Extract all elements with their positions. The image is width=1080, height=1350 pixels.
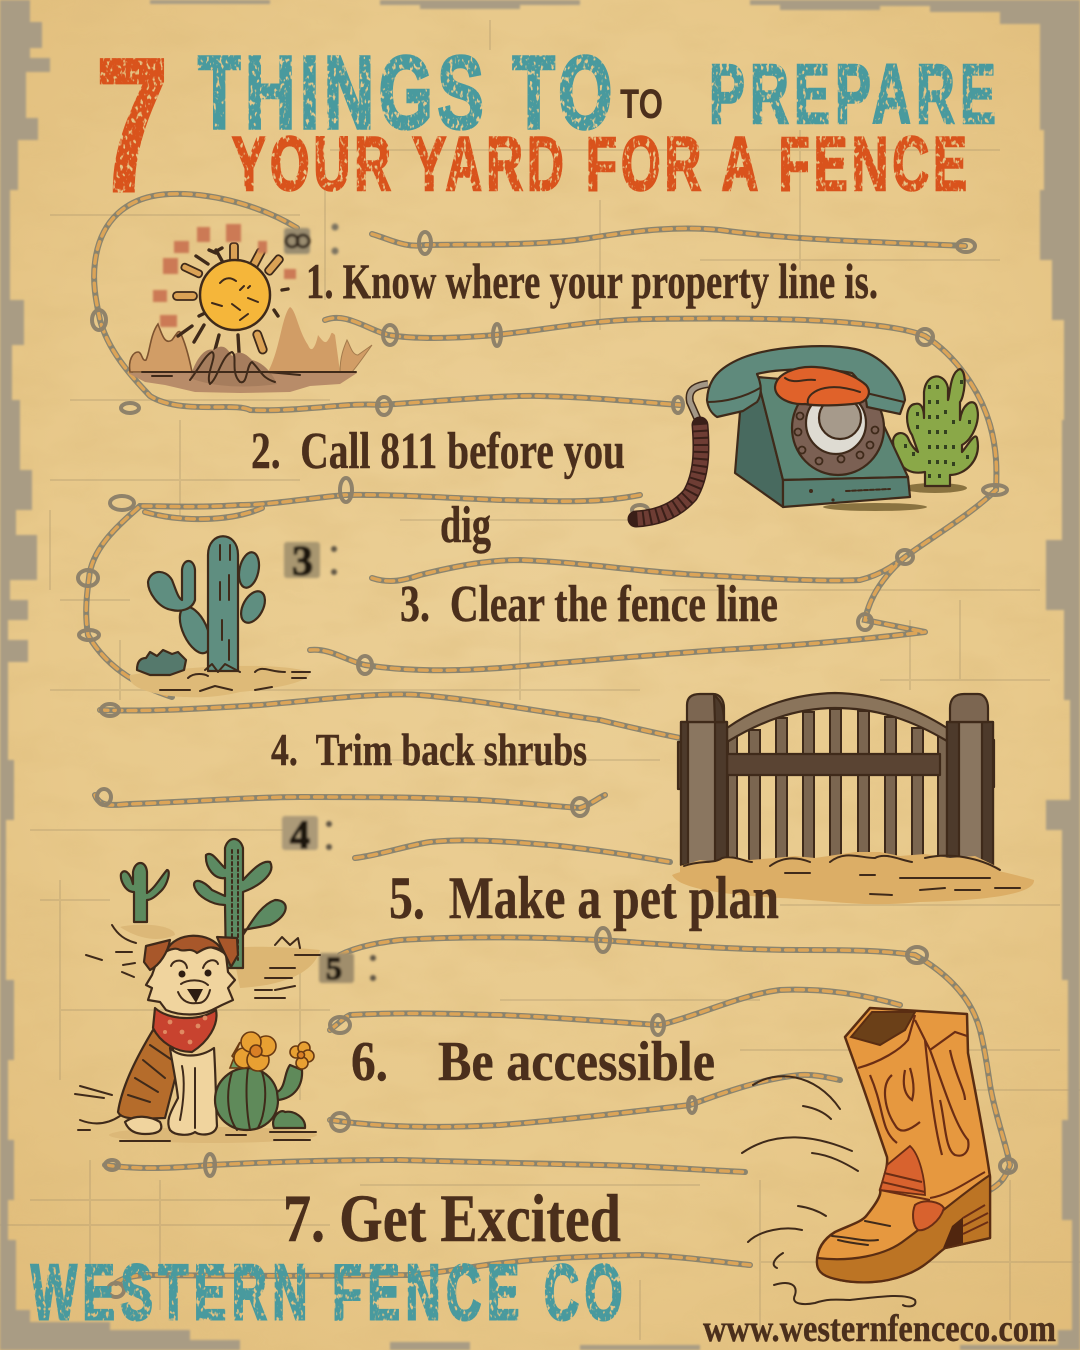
boot ankle panel bbox=[880, 1146, 925, 1195]
step 2 text: 2. Call 811 before you bbox=[251, 423, 625, 480]
step 2 text bbox=[251, 423, 625, 554]
flames and hills bbox=[130, 324, 192, 372]
marker 4: 4 bbox=[290, 812, 310, 857]
company name: WESTERN FENCE CO bbox=[31, 1248, 628, 1336]
orange cradle bbox=[775, 367, 869, 405]
marker 3: 3 bbox=[292, 539, 313, 585]
tall cactus bbox=[194, 839, 286, 968]
small shrub bbox=[273, 1111, 305, 1128]
boot opening bbox=[851, 1012, 915, 1045]
hook and cord bbox=[690, 384, 708, 420]
icon: wooden gate bbox=[672, 693, 1034, 904]
icon: dog with cacti bbox=[75, 839, 320, 1143]
step 6 text: 6. bbox=[351, 1031, 388, 1093]
shadow bbox=[823, 503, 927, 511]
barrel cactus bbox=[215, 1068, 278, 1130]
step 6 text bbox=[351, 1031, 715, 1093]
big seven: 7 bbox=[96, 20, 168, 230]
cross rail bbox=[727, 754, 940, 775]
icon: rotary telephone bbox=[636, 346, 978, 519]
grass tuft bbox=[137, 650, 186, 675]
step 4 text: 4. Trim back shrubs bbox=[271, 724, 587, 775]
top arch bbox=[727, 693, 947, 742]
headline line one: THINGS TO bbox=[198, 35, 617, 150]
title bbox=[96, 20, 1001, 230]
rope lines bbox=[78, 194, 1016, 1297]
boot sole bbox=[817, 1175, 990, 1282]
step 5 text: 5. Make a pet plan bbox=[389, 865, 779, 931]
right post bbox=[947, 694, 994, 865]
marker 1 bbox=[284, 224, 338, 254]
step 1 text: 1. Know where your property line is. bbox=[306, 253, 878, 309]
ground bbox=[109, 1127, 317, 1143]
boot stitching bbox=[858, 1015, 968, 1156]
side arms bbox=[236, 550, 262, 590]
handset bbox=[707, 346, 905, 417]
icon: cowboy boot bbox=[742, 1008, 990, 1306]
boot heel bbox=[943, 1217, 963, 1248]
ground bbox=[672, 858, 1034, 904]
faded red marks bbox=[153, 224, 296, 327]
rotary dial bbox=[792, 381, 884, 475]
sun rays bbox=[178, 248, 288, 352]
icon: teal saguaro cactus bbox=[130, 536, 310, 697]
telephone body bbox=[735, 377, 783, 507]
bandana bbox=[153, 1008, 216, 1052]
dog haunch paw bbox=[125, 1117, 161, 1134]
rocks bbox=[190, 347, 277, 386]
marker 5 bbox=[319, 950, 376, 986]
flowers bbox=[230, 1032, 314, 1071]
step 3 text: 3. Clear the fence line bbox=[400, 576, 778, 633]
rope knots bbox=[78, 232, 1016, 1297]
trunk bbox=[208, 536, 238, 671]
sun disc bbox=[200, 260, 270, 330]
marker 3 bbox=[284, 539, 337, 585]
face bbox=[171, 960, 218, 1003]
ground bbox=[130, 666, 310, 697]
dog body bbox=[118, 1030, 176, 1119]
icon: desert sun bbox=[128, 224, 372, 393]
tail bbox=[80, 1116, 120, 1123]
motion lines bbox=[742, 1076, 915, 1306]
left post bbox=[678, 694, 727, 865]
ears bbox=[144, 940, 170, 970]
step 6 text: Be accessible bbox=[438, 1031, 715, 1093]
boot toe patch bbox=[913, 1201, 944, 1230]
dog chest and legs bbox=[168, 1048, 217, 1135]
green cactus bbox=[893, 369, 978, 493]
sand patches bbox=[120, 925, 175, 939]
step 7 text: 7. Get Excited bbox=[283, 1180, 621, 1256]
boot upper bbox=[817, 1008, 990, 1282]
faded number markers bbox=[282, 224, 376, 986]
dog head bbox=[146, 946, 235, 1014]
small cactus bbox=[121, 863, 169, 922]
motion lines bbox=[75, 925, 320, 1130]
pickets bbox=[728, 709, 947, 865]
marker 5: 5 bbox=[326, 950, 342, 986]
step 2 text: dig bbox=[440, 497, 491, 554]
small word: TO bbox=[620, 80, 663, 127]
straw and dirt bbox=[680, 852, 1000, 882]
ground band bbox=[128, 373, 357, 393]
marker 4 bbox=[282, 812, 332, 857]
